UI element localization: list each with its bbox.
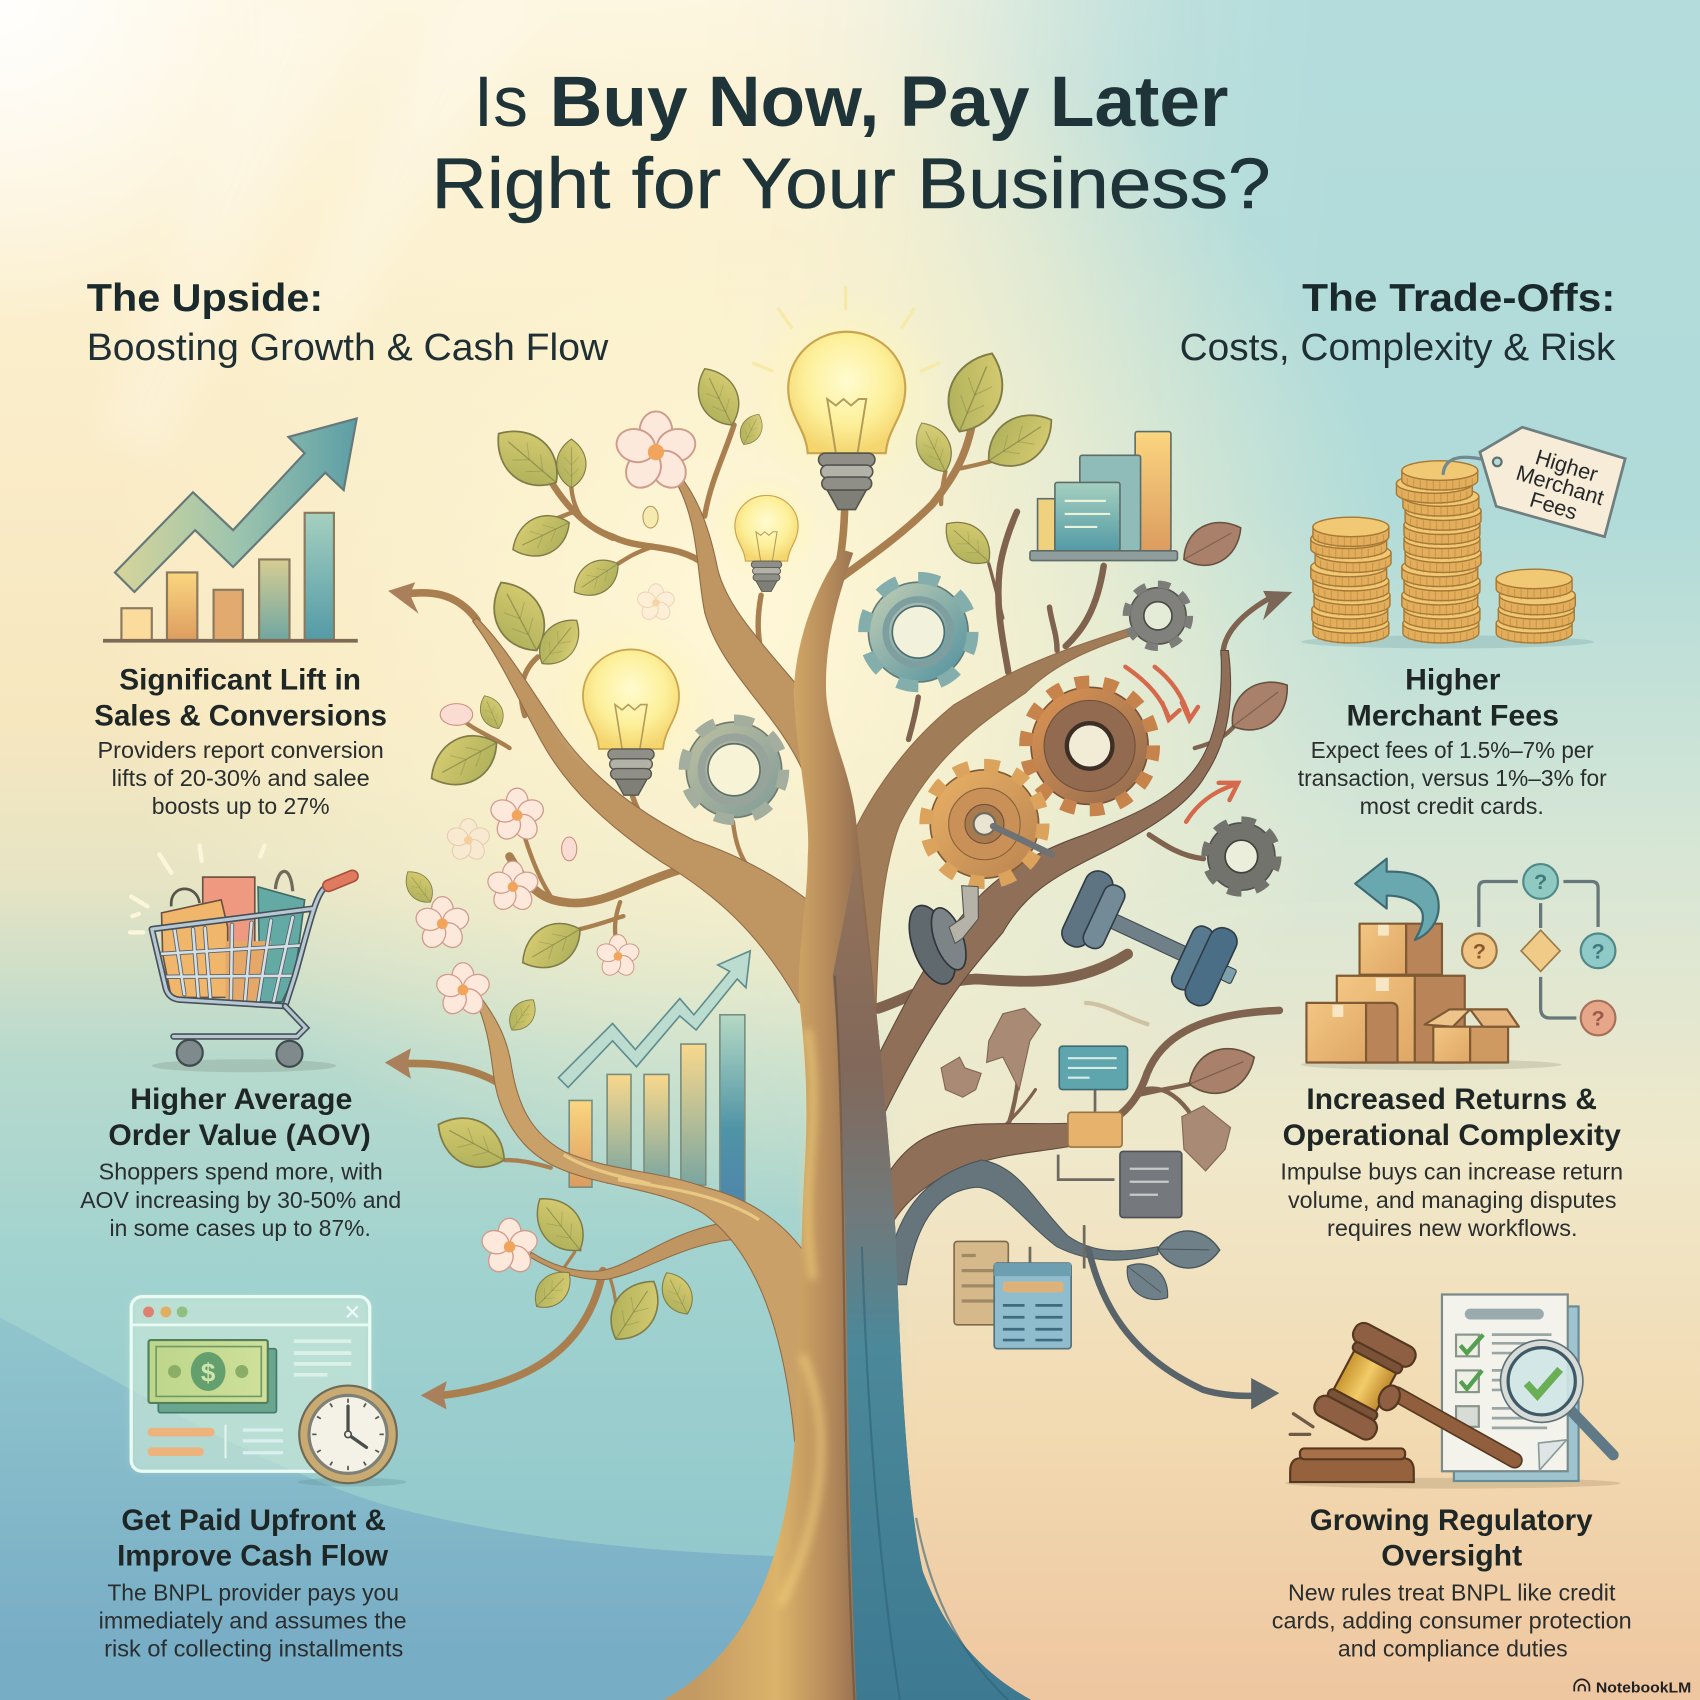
text: average order value: in some cases up to 87%.	[110, 1215, 371, 1241]
text: average order value	[80, 1084, 401, 1241]
heading: the trade-offs	[1180, 277, 1616, 369]
text: average order value: AOV increasing by 30-50% and	[80, 1187, 401, 1213]
text: regulatory oversight: Growing Regulatory	[1310, 1505, 1593, 1537]
trunk	[664, 550, 1031, 1700]
text: merchant fees: Expect fees of 1.5%–7% per	[1311, 737, 1594, 763]
text: average order value: Order Value (AOV)	[108, 1120, 371, 1152]
leaves	[399, 344, 1300, 1350]
text: returns and complexity: requires new workflows.	[1327, 1215, 1577, 1241]
text: paid upfront: Get Paid Upfront &	[121, 1505, 386, 1537]
right branches	[840, 627, 1263, 1396]
text: paid upfront: The BNPL provider pays you	[107, 1579, 399, 1605]
text: returns and complexity: Increased Returns &	[1306, 1084, 1597, 1116]
icon: dumbbell right	[1057, 866, 1251, 1015]
shelf with chart cards	[1030, 432, 1177, 561]
price tag: Fees	[1527, 487, 1581, 525]
text: paid upfront: risk of collecting installments	[104, 1636, 403, 1662]
text: merchant fees: most credit cards.	[1360, 793, 1544, 819]
price tag	[1480, 427, 1625, 537]
text: paid upfront: immediately and assumes the	[99, 1607, 407, 1633]
text: merchant fees: transaction, versus 1%–3% for	[1298, 765, 1607, 791]
process documents cluster	[954, 1046, 1182, 1349]
heading: the upside: Boosting Growth & Cash Flow	[87, 327, 609, 369]
title: Right for Your Business?	[432, 144, 1271, 224]
heading: the trade-offs: The Trade-Offs:	[1302, 277, 1615, 320]
text: sales lift: Sales & Conversions	[94, 700, 387, 732]
text: returns and complexity	[1280, 1084, 1623, 1241]
tree	[385, 287, 1300, 1700]
price tag: Merchant	[1513, 460, 1607, 510]
text: regulatory oversight: New rules treat BNPL like credit	[1288, 1579, 1616, 1605]
icon: return boxes and workflow: ?	[1591, 938, 1605, 963]
icon: return boxes and workflow	[1301, 859, 1615, 1070]
text: returns and complexity: Impulse buys can increase return	[1280, 1159, 1623, 1185]
text: regulatory oversight: and compliance duties	[1338, 1636, 1568, 1662]
icon: left light bulb	[547, 614, 715, 795]
text: average order value: Shoppers spend more, with	[99, 1159, 383, 1185]
icon: growth bar chart	[103, 418, 358, 641]
text: sales lift: Providers report conversion	[98, 737, 384, 763]
heading: the upside: The Upside:	[87, 277, 323, 320]
right side twigs	[878, 512, 1279, 1144]
icon: small light bulb	[711, 472, 822, 591]
price tag: Higher	[1532, 444, 1601, 487]
icon: teal gear	[864, 578, 973, 686]
text: paid upfront	[99, 1505, 407, 1662]
text: sales lift	[94, 665, 387, 819]
icon: small gear right	[1206, 821, 1277, 892]
title	[432, 62, 1271, 224]
text: sales lift: Significant Lift in	[119, 665, 361, 697]
red motion arrows	[1125, 667, 1238, 822]
icon: sage gear	[684, 720, 784, 820]
flowers	[413, 411, 700, 1277]
icon: payment window with cash and clock	[131, 1297, 407, 1486]
text: merchant fees: Higher	[1405, 665, 1501, 697]
icon: return boxes and workflow: ?	[1473, 938, 1486, 963]
icon: shopping cart	[130, 846, 352, 1072]
icon: return boxes and workflow: ?	[1534, 869, 1547, 894]
heading: the upside	[87, 277, 609, 369]
twigs	[403, 417, 992, 1395]
coin stack: left	[1311, 517, 1391, 644]
icon: small gray gear	[1126, 584, 1189, 647]
left branches	[473, 473, 857, 1442]
text: average order value: Higher Average	[130, 1084, 352, 1116]
text: regulatory oversight	[1272, 1505, 1632, 1662]
title: Is	[474, 62, 528, 142]
icon: orange gear	[926, 765, 1052, 883]
icon: copper gear	[1026, 682, 1154, 810]
coin stack: right	[1496, 569, 1575, 644]
text: returns and complexity: volume, and managing disputes	[1288, 1187, 1617, 1213]
coin stack: middle	[1396, 461, 1481, 644]
text: sales lift: lifts of 20-30% and salee	[112, 765, 370, 791]
text: merchant fees	[1298, 665, 1607, 819]
title: Buy Now, Pay Later	[550, 62, 1228, 142]
icon: broken dumbbell left	[898, 880, 1006, 990]
text: merchant fees: Merchant Fees	[1347, 700, 1559, 732]
text: regulatory oversight: cards, adding consumer protection	[1272, 1607, 1632, 1633]
text: sales lift: boosts up to 27%	[152, 793, 330, 819]
icon: payment window with cash and clock: $	[201, 1357, 216, 1387]
icon: gavel and compliance document	[1285, 1295, 1621, 1489]
watermark: NotebookLM: NotebookLM	[1596, 1679, 1691, 1696]
text: returns and complexity: Operational Complexity	[1283, 1120, 1622, 1152]
text: paid upfront: Improve Cash Flow	[117, 1541, 388, 1573]
tree chart: bars behind branch	[558, 951, 750, 1205]
text: regulatory oversight: Oversight	[1381, 1541, 1522, 1573]
withered leaves	[941, 1003, 1231, 1171]
branch arrowheads	[385, 582, 1292, 1409]
heading: the trade-offs: Costs, Complexity & Risk	[1180, 327, 1616, 369]
icon: coin stacks with fee tag	[1301, 427, 1625, 648]
icon: return boxes and workflow: ?	[1591, 1006, 1605, 1031]
icon: main light bulb	[744, 287, 950, 510]
